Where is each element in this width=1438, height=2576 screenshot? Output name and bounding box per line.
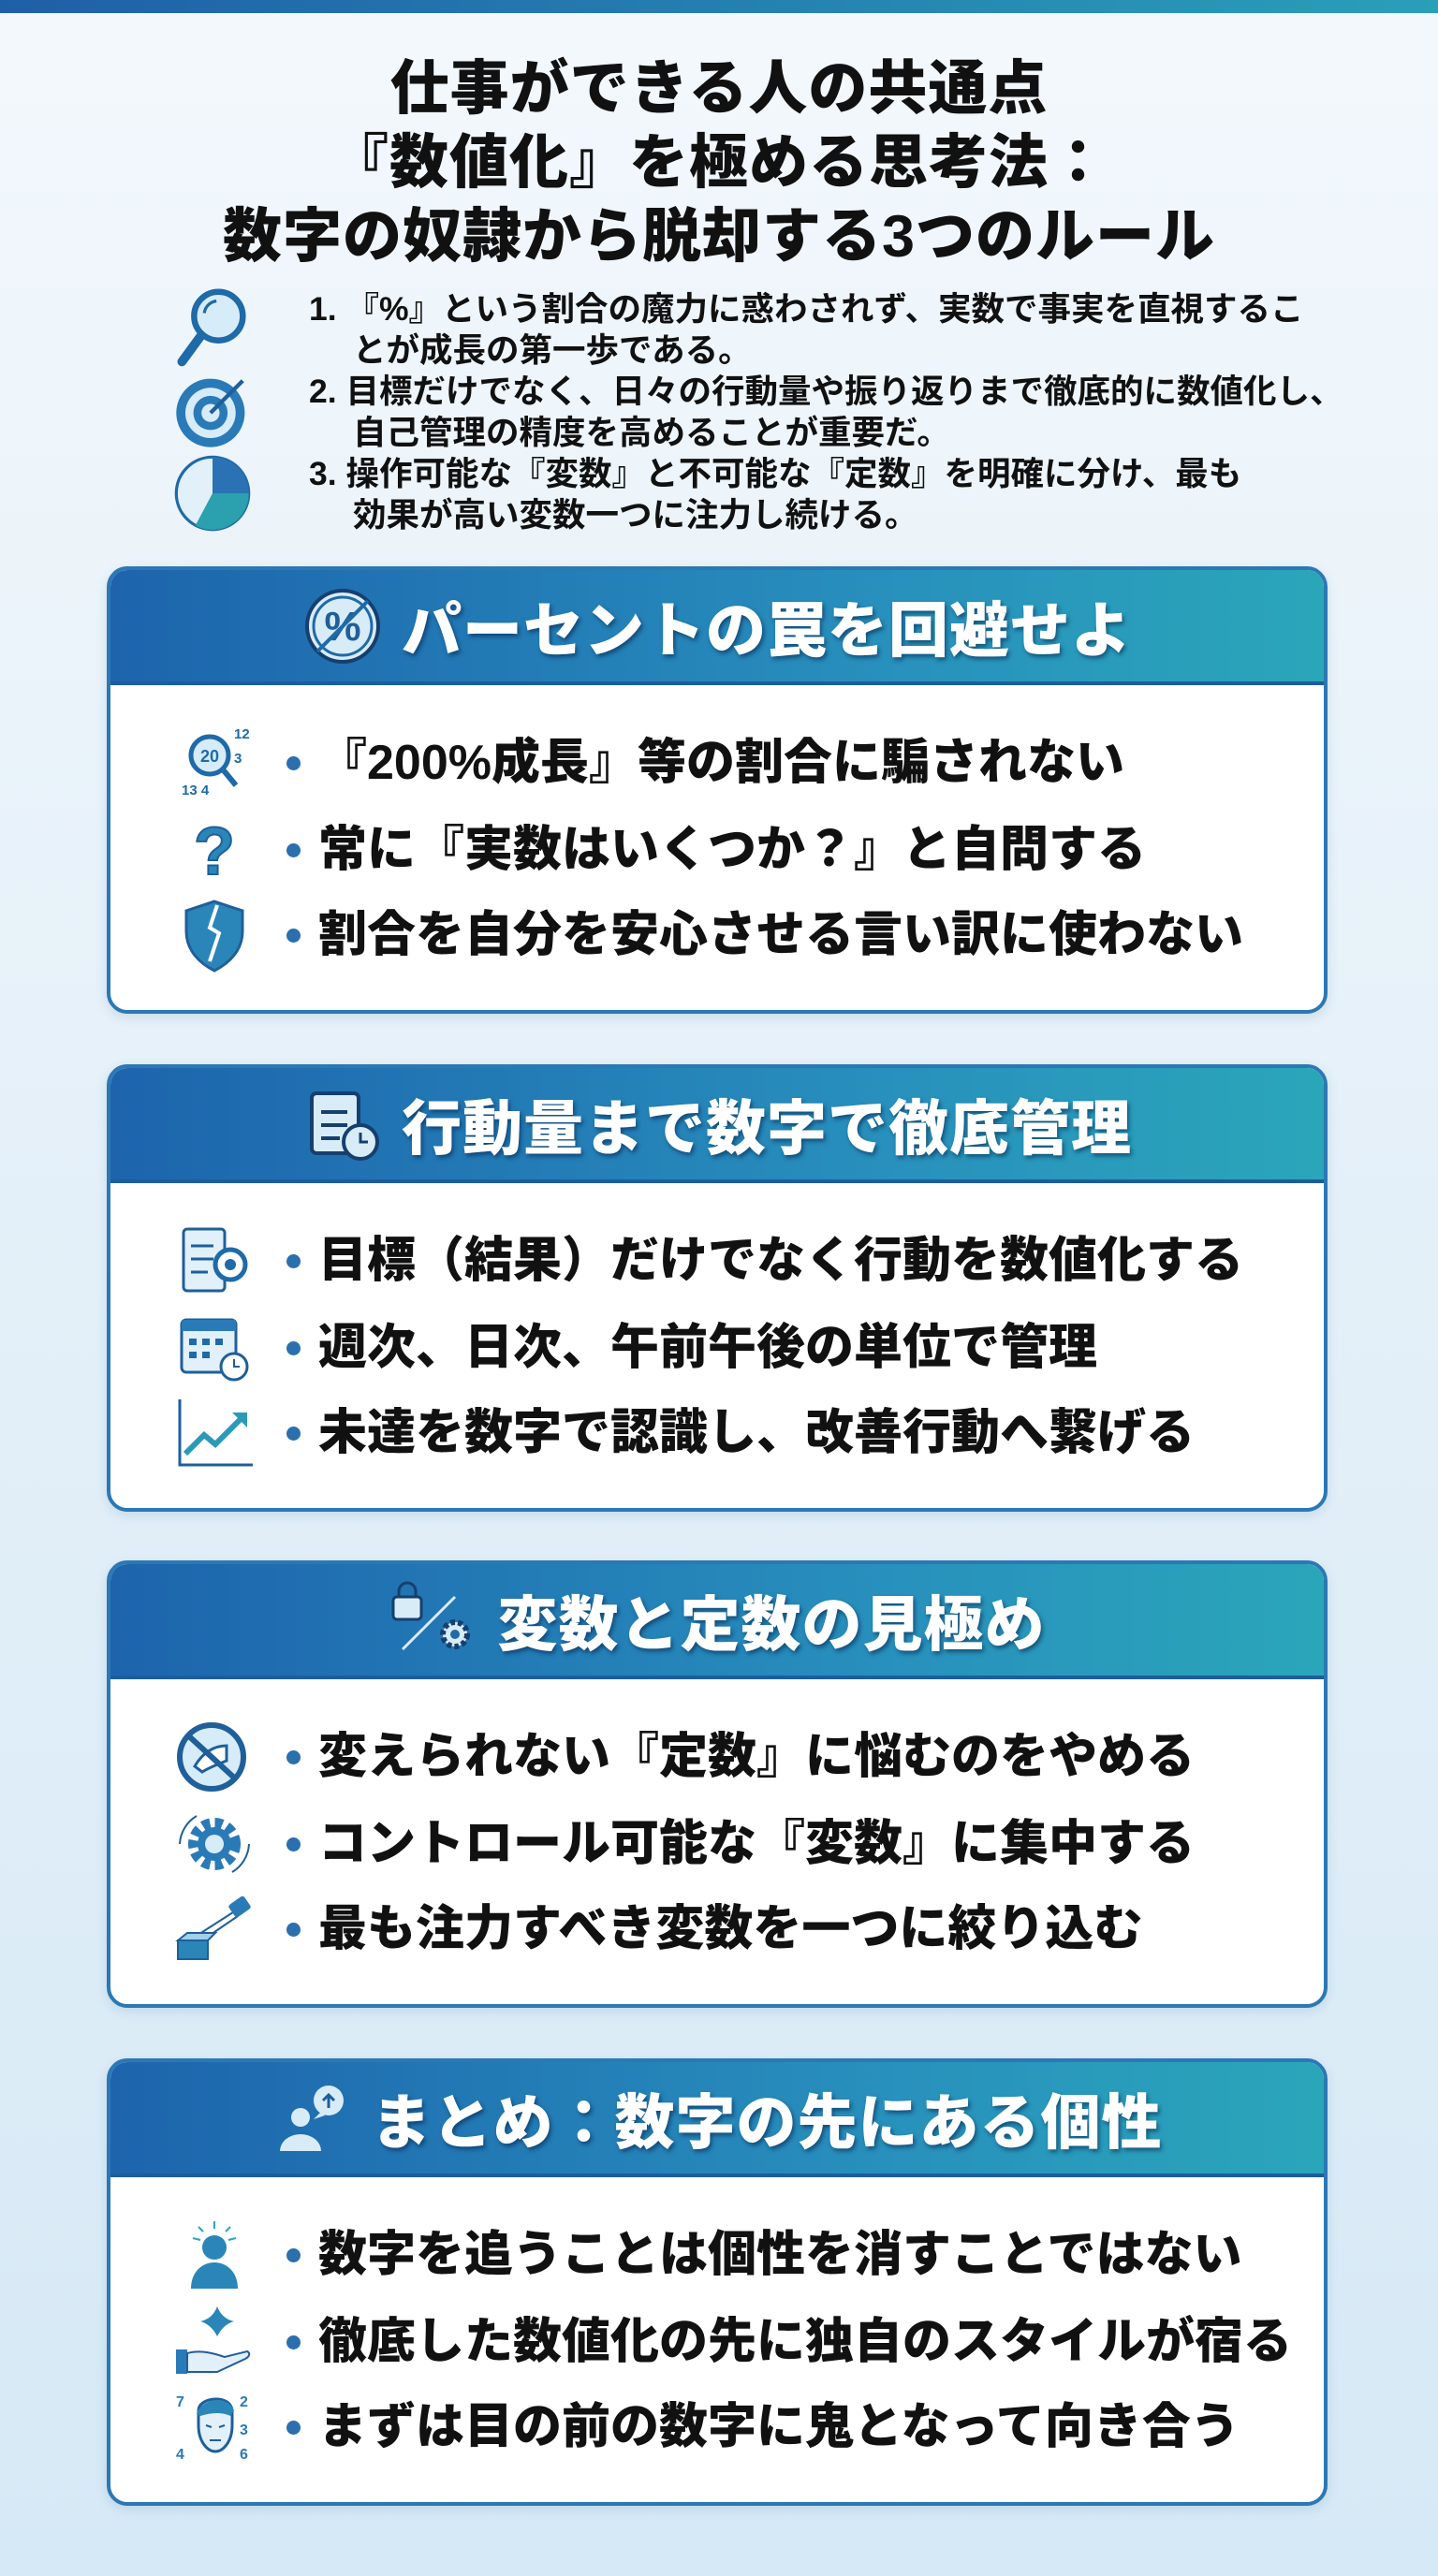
title: 数字の奴隷から脱却する3つのルール xyxy=(223,204,1215,270)
item 3: 3 xyxy=(240,2422,248,2438)
panel: variables and constants xyxy=(107,1560,1328,2008)
header: action management xyxy=(110,1068,1324,1183)
item 1: 数字を追うことは個性を消すことではない xyxy=(318,2228,1241,2282)
item 3: まずは目の前の数字に鬼となって向き合う xyxy=(318,2400,1240,2454)
header: summary: まとめ：数字の先にある個性 xyxy=(371,2089,1163,2157)
intro text: 1. 『%』という割合の魔力に惑わされず、実数で事実を直視するこ xyxy=(309,290,1304,328)
intro text: 3. 操作可能な『変数』と不可能な『定数』を明確に分け、最も xyxy=(309,455,1241,492)
item 2: 週次、日次、午前午後の単位で管理 xyxy=(318,1321,1097,1375)
header: action management: 行動量まで数字で徹底管理 xyxy=(402,1095,1132,1163)
header: variables and constants: 変数と定数の見極め xyxy=(498,1591,1045,1659)
intro text xyxy=(309,290,1343,534)
icon: target xyxy=(176,378,245,447)
item 1: 20 xyxy=(200,747,219,766)
item 3: 2 xyxy=(240,2394,248,2410)
panel: percent trap xyxy=(107,566,1328,1014)
top bar xyxy=(0,0,1438,13)
icon: pie chart xyxy=(174,455,251,532)
intro text: 自己管理の精度を高めることが重要だ。 xyxy=(353,414,950,451)
item 3: 6 xyxy=(240,2447,248,2463)
header: percent trap xyxy=(110,570,1324,685)
header: percent trap: % xyxy=(324,603,361,650)
item 3: 7 xyxy=(176,2394,184,2410)
header: variables and constants xyxy=(110,1564,1324,1679)
item 1: 目標（結果）だけでなく行動を数値化する xyxy=(318,1234,1243,1288)
item 2: 徹底した数値化の先に独自のスタイルが宿る xyxy=(318,2315,1292,2369)
panel: summary xyxy=(107,2058,1328,2506)
title: 『数値化』を極める思考法： xyxy=(330,130,1108,196)
title: 仕事ができる人の共通点 xyxy=(390,56,1048,122)
item 3: 割合を自分を安心させる言い訳に使わない xyxy=(318,908,1243,962)
item 3: 未達を数字で認識し、改善行動へ繋げる xyxy=(318,1406,1195,1460)
item 3 xyxy=(185,900,1243,973)
item 2: 常に『実数はいくつか？』と自問する xyxy=(318,823,1146,877)
item 2: ? xyxy=(194,814,235,887)
item 3 xyxy=(178,1399,1195,1466)
header: summary xyxy=(110,2062,1324,2177)
item 2 xyxy=(194,814,1146,887)
panel: action management xyxy=(107,1064,1328,1512)
intro text: とが成長の第一歩である。 xyxy=(353,331,752,369)
item 2: コントロール可能な『変数』に集中する xyxy=(318,1817,1195,1871)
item 3: 4 xyxy=(176,2447,184,2463)
item 1 xyxy=(182,726,1124,798)
intro list xyxy=(174,288,1343,534)
item 1: 変えられない『定数』に悩むのをやめる xyxy=(318,1730,1195,1784)
item 3: 最も注力すべき変数を一つに絞り込む xyxy=(318,1902,1142,1956)
title xyxy=(223,56,1215,270)
item 1: 『200%成長』等の割合に騙されない xyxy=(318,736,1124,790)
item 1: 3 xyxy=(234,751,242,767)
item 3 xyxy=(176,2394,1240,2463)
item 1 xyxy=(177,1722,1195,1792)
header: percent trap: パーセントの罠を回避せよ xyxy=(402,597,1132,665)
item 1: 13 4 xyxy=(182,783,210,798)
intro text: 効果が高い変数一つに注力し続ける。 xyxy=(353,496,918,534)
intro text: 2. 目標だけでなく、日々の行動量や振り返りまで徹底的に数値化し、 xyxy=(309,373,1343,410)
icon: magnifier xyxy=(178,288,246,367)
item 1: 12 xyxy=(234,726,250,742)
